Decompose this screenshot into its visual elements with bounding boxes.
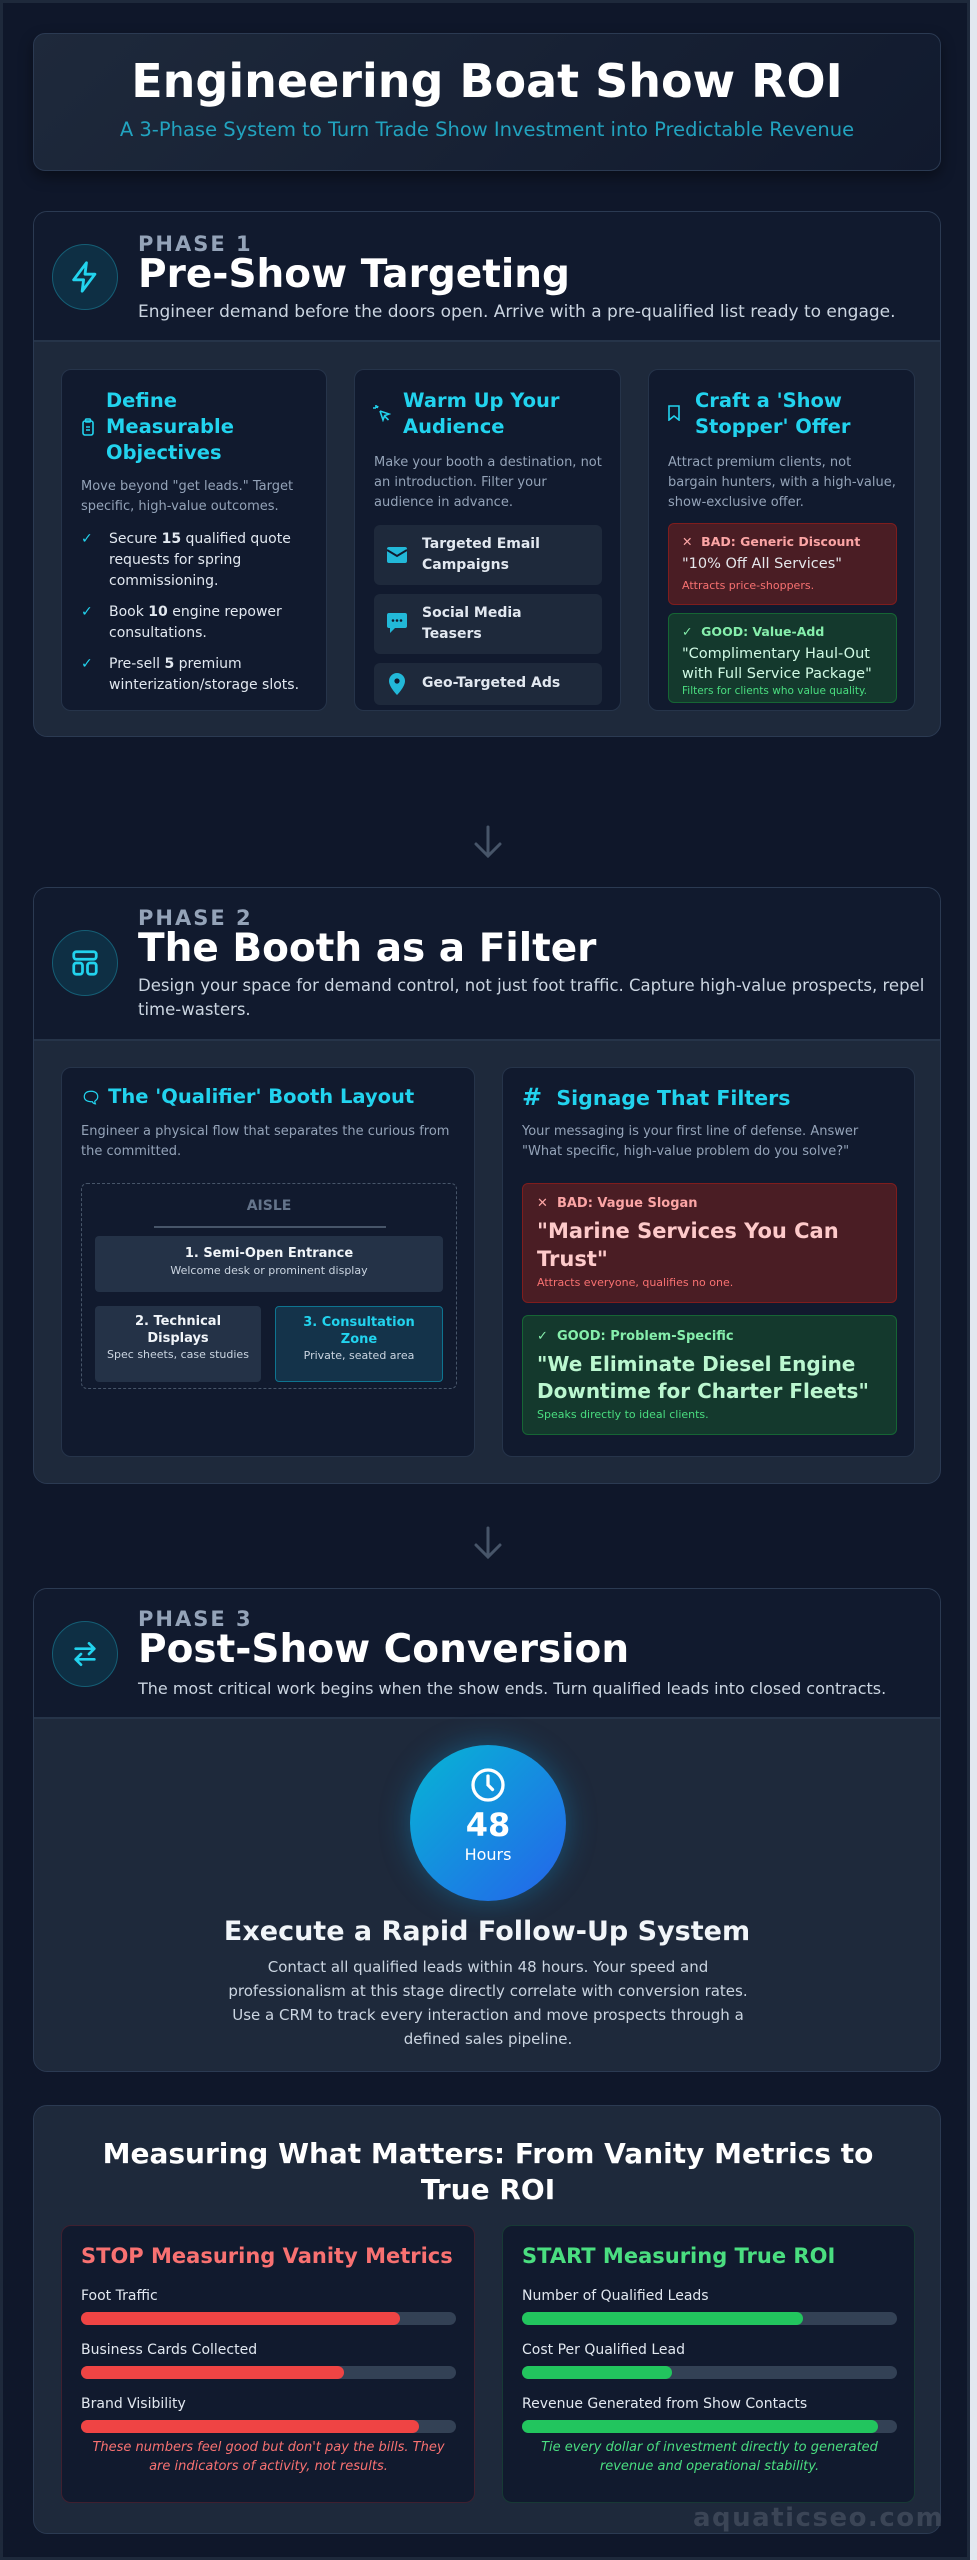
phase label: PHASE 1 bbox=[138, 232, 253, 256]
description: Make your booth a destination, not an introduction. Filter your audience in advance. bbox=[374, 455, 602, 510]
badge: 48 hours: 48 bbox=[466, 1806, 510, 1844]
callout: bad slogan bbox=[522, 1183, 897, 1303]
callout: good slogan bbox=[522, 1315, 897, 1435]
callout: good slogan: "We Eliminate Diesel Engine Downtime for Charter Fleets" bbox=[537, 1352, 869, 1403]
callout: bad slogan: ✕ BAD: Vague Slogan bbox=[537, 1196, 698, 1211]
bars bbox=[522, 2288, 897, 2433]
panel: phase 3 bbox=[33, 1588, 941, 2072]
zone 3: Private, seated area bbox=[304, 1349, 414, 1362]
checklist bbox=[81, 531, 299, 693]
note: Tie every dollar of investment directly to generated revenue and operational stability. bbox=[541, 2440, 878, 2474]
title: Engineering Boat Show ROI bbox=[131, 54, 843, 108]
bars: Revenue Generated from Show Contacts bbox=[522, 2396, 807, 2412]
zone 3: Zone bbox=[341, 1332, 377, 1347]
card: signage bbox=[502, 1067, 915, 1457]
bars: Brand Visibility bbox=[81, 2396, 186, 2412]
callout: bad slogan: "Marine Services You Can Trust" bbox=[537, 1219, 839, 1271]
callout: good slogan: ✓ GOOD: Problem-Specific bbox=[537, 1329, 734, 1344]
callout: bad bbox=[668, 523, 897, 605]
card: show stopper offer bbox=[648, 369, 915, 711]
card: objectives bbox=[61, 369, 327, 711]
bars bbox=[81, 2288, 456, 2433]
item: social: Social Media bbox=[422, 605, 522, 621]
panel: metrics bbox=[33, 2105, 941, 2534]
badge: 48 hours: Hours bbox=[465, 1845, 511, 1864]
panel: phase 1 bbox=[33, 211, 941, 737]
diagram: booth bbox=[81, 1183, 457, 1389]
description: Move beyond "get leads." Target specific, high-value outcomes. bbox=[81, 479, 293, 514]
phase subtitle: The most critical work begins when the show ends. Turn qualified leads into closed contracts. bbox=[138, 1679, 886, 1698]
item: email: Campaigns bbox=[422, 557, 509, 573]
heading: Warm Up Your Audience bbox=[403, 389, 560, 438]
zone 2: Displays bbox=[147, 1331, 209, 1346]
icon: arrows bbox=[52, 1621, 118, 1687]
phase subtitle: Design your space for demand control, not just foot traffic. Capture high-value prospects, repel time-wasters. bbox=[138, 976, 924, 1019]
card: start bbox=[502, 2225, 915, 2503]
bars: Number of Qualified Leads bbox=[522, 2288, 709, 2304]
heading: Define Measurable Objectives bbox=[106, 389, 234, 464]
icon: layout bbox=[52, 930, 118, 996]
card: stop bbox=[61, 2225, 475, 2503]
heading: Execute a Rapid Follow-Up System bbox=[224, 1916, 750, 1947]
phase 2 header bbox=[34, 888, 940, 1041]
phase title: Post-Show Conversion bbox=[138, 1627, 629, 1672]
phase subtitle: Engineer demand before the doors open. Arrive with a pre-qualified list ready to engage. bbox=[138, 302, 896, 322]
subtitle: A 3-Phase System to Turn Trade Show Investment into Predictable Revenue bbox=[120, 118, 854, 141]
zone 2: Spec sheets, case studies bbox=[107, 1348, 249, 1361]
description: Your messaging is your first line of defense. Answer "What specific, high-value problem do you solve?" bbox=[522, 1124, 858, 1159]
description: Attract premium clients, not bargain hunters, with a high-value, show-exclusive offer. bbox=[668, 455, 896, 510]
zone 2 bbox=[95, 1306, 261, 1382]
paragraph: Contact all qualified leads within 48 hours. Your speed and professionalism at this stage directly correlate with conversion rates. Use a CRM to track every interaction and move prospects through a defined sales pipeline. bbox=[228, 1958, 748, 2048]
item: social: Teasers bbox=[422, 626, 482, 642]
zone 3: 3. Consultation bbox=[303, 1315, 415, 1330]
zone 1 bbox=[95, 1236, 443, 1292]
callout: good: "Complimentary Haul-Out with Full Service Package" bbox=[682, 646, 872, 682]
callout: good: Filters for clients who value quality. bbox=[682, 685, 867, 697]
checklist: ✓ bbox=[81, 656, 93, 672]
phase label: PHASE 3 bbox=[138, 1607, 253, 1631]
item: email bbox=[374, 525, 602, 585]
badge: 48 hours bbox=[410, 1745, 566, 1901]
checklist: Pre-sell 5 premium winterization/storage slots. bbox=[109, 656, 299, 693]
zone 2: 2. Technical bbox=[135, 1314, 221, 1329]
heading: START Measuring True ROI bbox=[522, 2244, 835, 2268]
phase title: Pre-Show Targeting bbox=[138, 252, 570, 297]
checklist: ✓ bbox=[81, 531, 93, 547]
card: warm up audience bbox=[354, 369, 621, 711]
arrow bbox=[474, 1526, 502, 1559]
heading: STOP Measuring Vanity Metrics bbox=[81, 2244, 453, 2268]
phase label: PHASE 2 bbox=[138, 906, 253, 930]
panel: phase 2 bbox=[33, 887, 941, 1484]
callout: good slogan: Speaks directly to ideal clients. bbox=[537, 1408, 709, 1421]
callout: bad slogan: Attracts everyone, qualifies no one. bbox=[537, 1276, 733, 1289]
bars: Foot Traffic bbox=[81, 2288, 158, 2304]
callout: bad: "10% Off All Services" bbox=[682, 556, 842, 572]
item: geo bbox=[374, 663, 602, 705]
header card bbox=[33, 33, 941, 171]
diagram: booth: AISLE bbox=[247, 1198, 291, 1214]
bars: Business Cards Collected bbox=[81, 2342, 257, 2358]
heading: # Signage That Filters bbox=[522, 1083, 790, 1111]
icon: clipboard bbox=[82, 418, 94, 436]
heading: 🗨 The 'Qualifier' Booth Layout bbox=[81, 1085, 414, 1108]
callout: good: ✓ GOOD: Value-Add bbox=[682, 624, 824, 639]
description: Engineer a physical flow that separates the curious from the committed. bbox=[81, 1124, 449, 1159]
callout: bad: Attracts price-shoppers. bbox=[682, 579, 814, 592]
callout: bad: ✕ BAD: Generic Discount bbox=[682, 534, 860, 549]
watermark: aquaticseo.com bbox=[693, 2503, 944, 2533]
heading: Craft a 'Show Stopper' Offer bbox=[695, 389, 850, 438]
icon: bookmark bbox=[668, 405, 680, 421]
icon: lightning bbox=[52, 244, 118, 310]
phase 3 header bbox=[34, 1589, 940, 1719]
card: booth layout bbox=[61, 1067, 475, 1457]
bars: Cost Per Qualified Lead bbox=[522, 2342, 685, 2358]
arrow bbox=[474, 826, 502, 858]
icon: cursor bbox=[373, 405, 391, 422]
checklist: ✓ bbox=[81, 604, 93, 620]
zone 3 bbox=[275, 1306, 443, 1382]
item: email: Targeted Email bbox=[422, 536, 540, 552]
checklist: Secure 15 qualified quote requests for spring commissioning. bbox=[109, 531, 291, 589]
zone 1: Welcome desk or prominent display bbox=[170, 1264, 368, 1277]
zone 1: 1. Semi-Open Entrance bbox=[185, 1246, 353, 1261]
heading: Measuring What Matters: From Vanity Metrics to True ROI bbox=[103, 2137, 873, 2206]
phase 1 header bbox=[34, 212, 940, 342]
item: social bbox=[374, 594, 602, 654]
item: geo: Geo-Targeted Ads bbox=[422, 675, 560, 691]
phase title: The Booth as a Filter bbox=[138, 926, 596, 971]
checklist: Book 10 engine repower consultations. bbox=[109, 604, 282, 641]
note: These numbers feel good but don't pay the bills. They are indicators of activity, not results. bbox=[92, 2440, 445, 2474]
callout: good bbox=[668, 613, 897, 703]
